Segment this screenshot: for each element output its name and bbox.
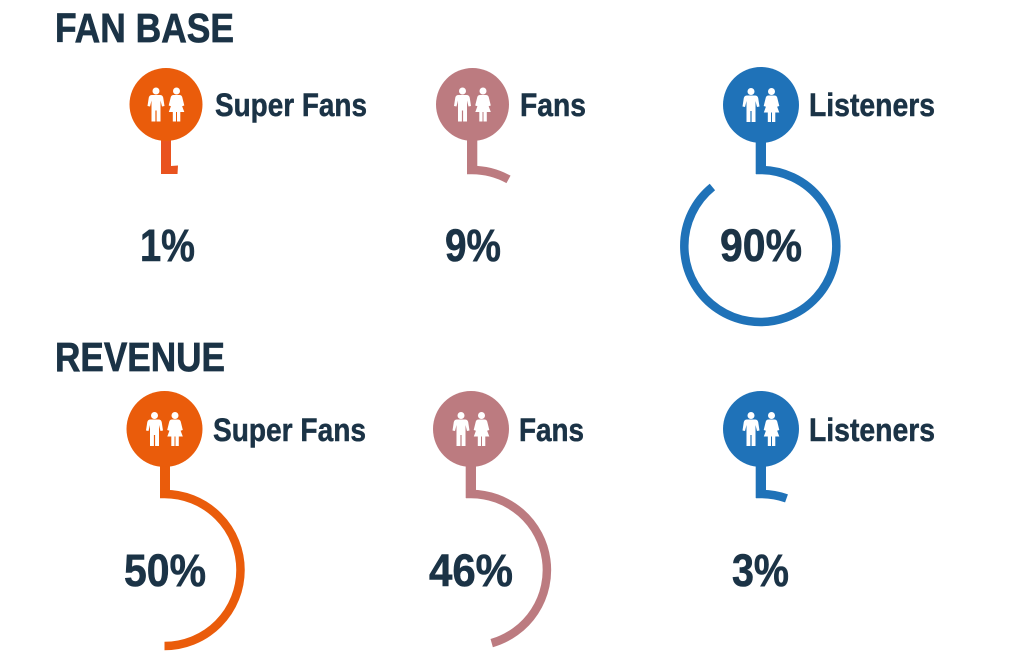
icon: fans people xyxy=(436,68,509,141)
arc: super fans 1% xyxy=(161,140,178,174)
fan base: fans xyxy=(436,68,586,271)
label: listeners: Listeners xyxy=(809,87,935,123)
value: 46%: 46% xyxy=(429,545,513,596)
fan base: listeners xyxy=(684,67,935,322)
revenue: super fans xyxy=(124,391,366,646)
icon: listeners people xyxy=(723,391,799,467)
value: 90%: 90% xyxy=(720,220,802,271)
label: super fans: Super Fans xyxy=(213,412,366,448)
arc: fans 9% xyxy=(467,140,508,179)
revenue: listeners xyxy=(723,391,935,596)
arc: listeners 3% xyxy=(756,460,786,498)
value: 3%: 3% xyxy=(732,545,789,596)
title: revenue: REVENUE xyxy=(55,334,225,380)
label: fans: Fans xyxy=(519,412,584,448)
icon: listeners people xyxy=(723,67,799,143)
title: fan base: FAN BASE xyxy=(55,5,234,51)
icon: fans people xyxy=(433,391,509,467)
arc: fans 46% xyxy=(466,460,547,643)
label: listeners: Listeners xyxy=(809,412,935,448)
icon: super fans people xyxy=(130,68,202,141)
value: 50%: 50% xyxy=(124,545,206,596)
arc: super fans 50% xyxy=(160,460,240,646)
label: fans: Fans xyxy=(520,87,586,123)
value: 9%: 9% xyxy=(445,220,501,271)
icon: super fans people xyxy=(126,391,202,467)
revenue: fans xyxy=(429,391,584,643)
arc: listeners 90% xyxy=(684,140,836,322)
fan base: super fans xyxy=(130,68,367,271)
value: 1%: 1% xyxy=(140,220,195,271)
label: super fans: Super Fans xyxy=(215,87,367,123)
